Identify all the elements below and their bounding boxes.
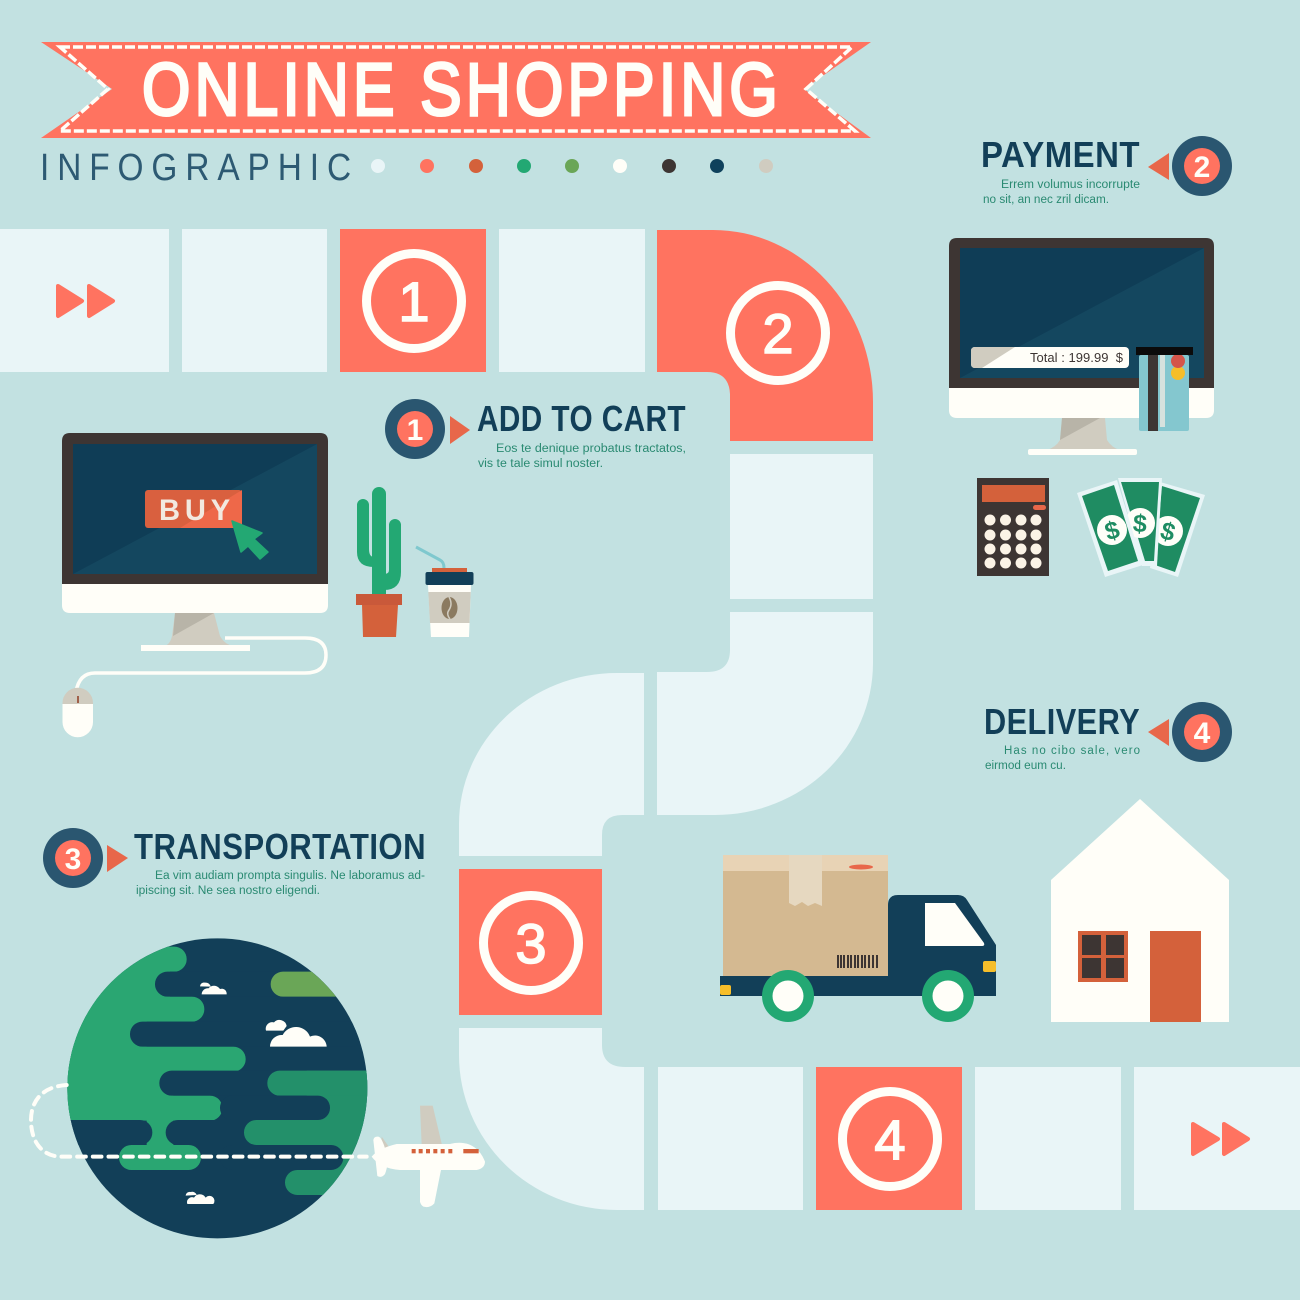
section: delivery heading: DELIVERY <box>984 701 1140 742</box>
right bill: $ <box>1157 517 1178 547</box>
tile blank <box>730 454 873 599</box>
end tile with fast-forward arrows <box>1134 1067 1300 1210</box>
clouds <box>186 983 327 1204</box>
section: delivery heading: Has no cibo sale, vero <box>1004 745 1140 757</box>
tile step 3: 3 <box>515 912 547 975</box>
icon: house <box>1051 799 1229 1022</box>
icon: delivery truck with parcel <box>720 855 996 1022</box>
section: transportation heading: TRANSPORTATION <box>134 826 426 867</box>
section: payment heading: Errem volumus incorrupte <box>1001 179 1140 191</box>
illustration: globe with flight path and plane <box>20 933 485 1247</box>
icon: computer mouse <box>62 688 93 737</box>
tile blank <box>975 1067 1121 1210</box>
left bill: $ <box>1102 516 1123 546</box>
board path: track tiles <box>0 229 1300 1210</box>
barcode <box>838 955 877 968</box>
curved tile blank <box>657 612 873 815</box>
tile step 4: 4 <box>874 1108 906 1171</box>
tile step 1 <box>340 229 486 372</box>
section: add to cart heading: ADD TO CART <box>477 398 686 439</box>
globe <box>67 938 368 1238</box>
section: delivery heading: 4 <box>1194 717 1211 750</box>
section: add to cart heading: vis te tale simul noster. <box>478 458 603 470</box>
plane <box>372 1106 485 1207</box>
icon: desktop computer with payment total <box>949 238 1214 455</box>
curved tile step 2 <box>657 230 873 441</box>
parcel box <box>723 855 888 976</box>
tile blank <box>658 1067 803 1210</box>
section: payment heading <box>981 134 1232 206</box>
section: transportation heading: ipiscing sit. Ne sea nostro eligendi. <box>136 885 320 897</box>
section: payment heading: no sit, an nec zril dicam. <box>983 194 1109 206</box>
buy button: BUY <box>159 494 235 527</box>
ocean inlets <box>70 972 360 1145</box>
section: transportation heading: 3 <box>65 843 81 876</box>
icon: coffee cup <box>416 547 474 637</box>
tile blank <box>499 229 645 372</box>
curved tile blank <box>459 1028 644 1210</box>
northern green strip <box>270 972 336 997</box>
section: payment heading: PAYMENT <box>981 134 1140 175</box>
section: add to cart heading: Eos te denique probatus tractatos, <box>496 443 686 455</box>
curved tile blank <box>459 673 644 856</box>
tile step 4 <box>816 1067 962 1210</box>
icon: dollar bills <box>1077 478 1205 577</box>
tile step 3 <box>459 869 602 1015</box>
center bill: $ <box>1132 510 1148 538</box>
icon: cactus in pot <box>356 487 402 637</box>
cursor <box>232 521 268 559</box>
left continent <box>67 946 246 1170</box>
palette dots <box>371 159 773 173</box>
credit card in slot <box>1136 347 1193 431</box>
right continent <box>244 1070 368 1195</box>
section: transportation heading <box>43 826 426 897</box>
subtitle: infographic: INFOGRAPHIC <box>40 147 359 189</box>
section: payment heading: 2 <box>1194 151 1210 184</box>
total bar <box>971 347 1129 368</box>
section: transportation heading: Ea vim audiam prompta singulis. Ne laboramus ad- <box>155 870 425 882</box>
cab and chassis <box>720 895 996 996</box>
section: add to cart heading <box>385 398 686 470</box>
tile step 1: 1 <box>398 270 430 333</box>
dashed flight path <box>31 1085 367 1157</box>
tile blank <box>182 229 327 372</box>
title banner: ONLINE SHOPPING <box>142 48 782 131</box>
start tile with fast-forward arrows <box>0 229 169 372</box>
curved tile step 2: 2 <box>762 302 794 365</box>
section: delivery heading <box>984 701 1232 772</box>
mouse cable <box>76 638 326 692</box>
icon: calculator <box>977 478 1049 576</box>
wheels <box>762 970 974 1022</box>
total bar: Total : 199.99 $ <box>1030 350 1124 365</box>
section: delivery heading: eirmod eum cu. <box>985 760 1066 772</box>
icon: desktop computer with buy button <box>62 433 328 692</box>
section: add to cart heading: 1 <box>407 414 423 447</box>
